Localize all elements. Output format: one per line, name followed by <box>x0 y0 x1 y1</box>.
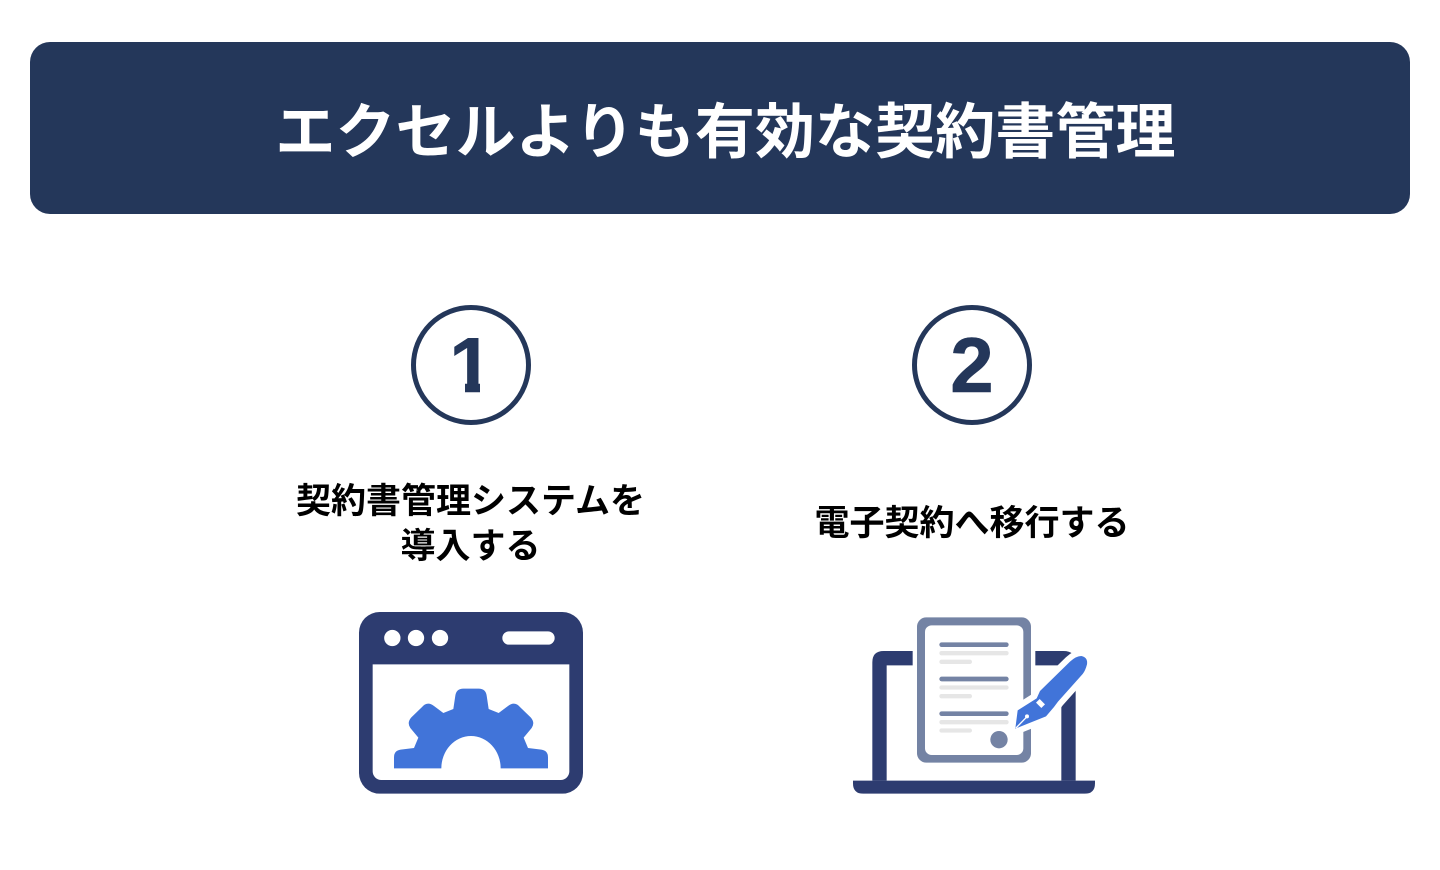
label: step 1: 導入する <box>400 527 540 566</box>
label: step 1: 契約書管理システムを <box>296 482 645 521</box>
title: エクセルよりも有効な契約書管理 <box>275 99 1176 166</box>
number badge 1: 1 <box>449 321 493 409</box>
label: step 1 <box>296 482 645 566</box>
number badge 2 <box>912 305 1032 425</box>
header banner <box>30 42 1410 214</box>
label: step 2: 電子契約へ移行する <box>814 504 1130 543</box>
number badge 2: 2 <box>950 321 994 409</box>
number badge 1 <box>411 305 531 425</box>
